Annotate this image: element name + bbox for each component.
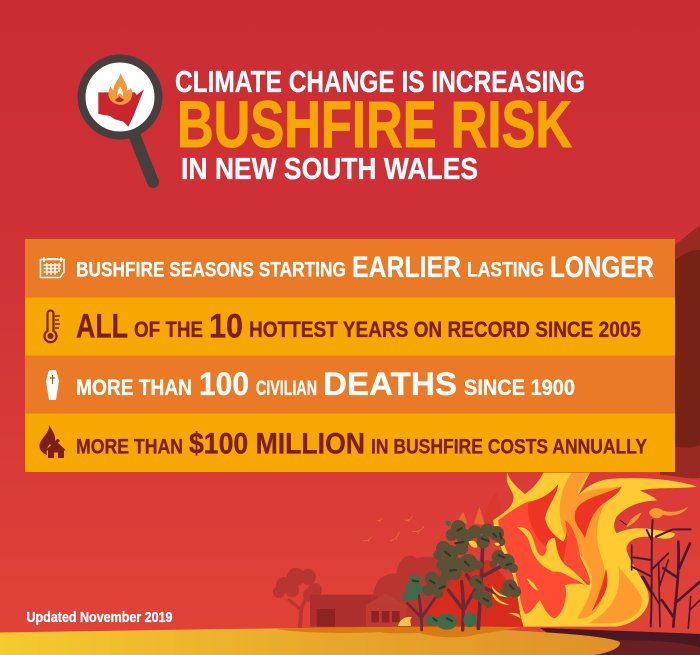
ground bbox=[0, 627, 700, 655]
title: CLIMATE CHANGE IS INCREASING bbox=[175, 64, 585, 99]
icon: thermometer bbox=[44, 310, 60, 342]
bar 2: hottest years: HOTTEST YEARS ON RECORD SINCE 2005 bbox=[249, 317, 641, 342]
foreground gum trees bbox=[402, 520, 521, 630]
bar 2: hottest years: ALL bbox=[76, 308, 128, 346]
distant silhouette tree bbox=[273, 568, 323, 628]
feature bars bbox=[25, 239, 675, 472]
magnifying glass icon bbox=[82, 58, 158, 182]
bar 1: seasons bbox=[25, 239, 675, 298]
bar 1: seasons: BUSHFIRE SEASONS STARTING bbox=[76, 258, 346, 282]
icon: calendar bbox=[40, 257, 64, 278]
small fire bbox=[398, 617, 412, 626]
bushfire flames bbox=[492, 473, 697, 627]
icon: fire and house bbox=[39, 425, 66, 458]
bar 4: costs: MORE THAN bbox=[76, 436, 183, 458]
bar 1: seasons: LASTING bbox=[467, 258, 544, 282]
bar 2: hottest years bbox=[25, 298, 675, 356]
updated date note: Updated November 2019 bbox=[26, 610, 172, 626]
icon: coffin bbox=[46, 370, 59, 400]
bar 3: deaths bbox=[25, 356, 675, 414]
birds bbox=[363, 516, 424, 542]
back flames and back trees bbox=[373, 492, 523, 627]
bar 3: deaths: CIVILIAN bbox=[256, 377, 317, 400]
bar 4: costs: $100 MILLION bbox=[189, 428, 365, 460]
bar 2: hottest years: OF THE bbox=[134, 317, 203, 342]
title: IN NEW SOUTH WALES bbox=[181, 151, 478, 186]
canopy shadow marks bbox=[413, 528, 513, 621]
bar 3: deaths: SINCE 1900 bbox=[464, 375, 575, 400]
title bbox=[175, 64, 585, 186]
bar 2: hottest years: 10 bbox=[209, 308, 243, 346]
tree trunks bbox=[407, 545, 507, 630]
house bbox=[310, 593, 407, 627]
bar 4: costs: IN BUSHFIRE COSTS ANNUALLY bbox=[371, 436, 647, 458]
bar 3: deaths: 100 bbox=[199, 366, 249, 402]
bar 3: deaths: DEATHS bbox=[323, 366, 457, 402]
bar 3: deaths: MORE THAN bbox=[76, 375, 192, 400]
olive canopy bbox=[422, 520, 521, 608]
green small tree and shrubs bbox=[402, 521, 477, 630]
burnt dead trees bbox=[632, 520, 700, 628]
bar 4: costs bbox=[25, 414, 675, 472]
distant hill bbox=[660, 226, 700, 479]
bar 1: seasons: EARLIER bbox=[352, 251, 461, 284]
title: BUSHFIRE RISK bbox=[177, 87, 572, 161]
bar 1: seasons: LONGER bbox=[550, 251, 654, 284]
